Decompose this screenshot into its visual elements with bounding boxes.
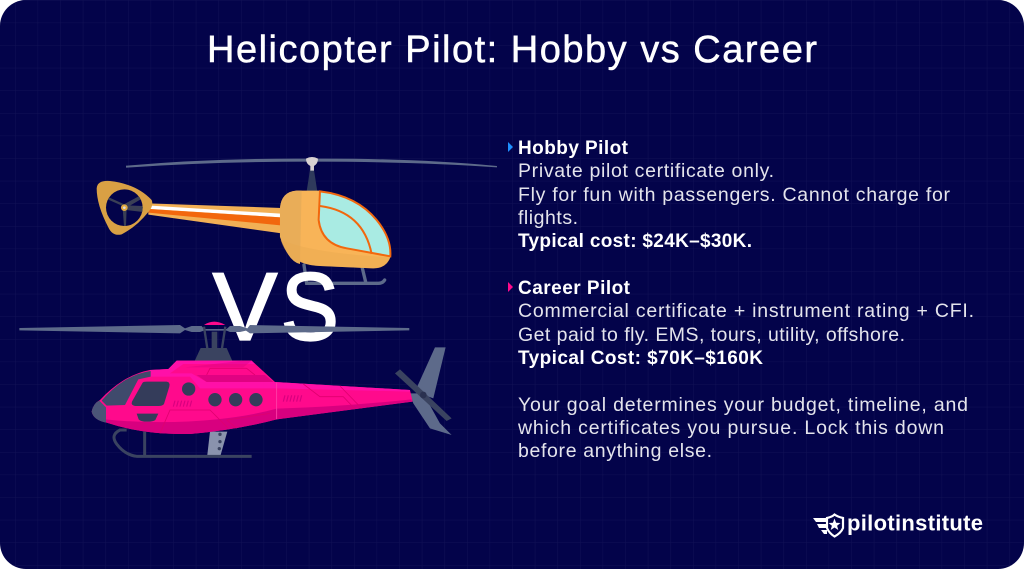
rotor head — [194, 322, 233, 362]
tail boom — [148, 203, 282, 233]
body line: Private pilot certificate only. — [518, 160, 774, 182]
illustration: orange hobby helicopter — [97, 157, 497, 283]
typical cost: Typical cost: $24K–$30K. — [518, 231, 752, 252]
logo wordmark: pilotinstitute — [847, 510, 983, 536]
landing skid — [304, 265, 385, 283]
body line: Commercial certificate + instrument rating + CFI. — [518, 300, 974, 322]
tail fin and rotor — [395, 347, 452, 435]
VS label: S — [281, 253, 339, 361]
text panel — [508, 138, 974, 462]
VS label — [213, 253, 339, 361]
cockpit window — [319, 191, 390, 256]
bullet marker: pink — [508, 282, 513, 292]
main rotor — [126, 159, 497, 168]
heading: hobby pilot: Hobby Pilot — [518, 138, 629, 159]
tail rotor housing — [97, 181, 152, 235]
panel lines — [160, 368, 362, 433]
typical cost: Typical Cost: $70K–$160K — [518, 348, 763, 369]
mast — [307, 170, 317, 191]
cabin — [280, 191, 391, 268]
cockpit window — [132, 382, 170, 406]
body line: flights. — [518, 207, 578, 229]
section: career pilot — [508, 278, 974, 369]
closing note: before anything else. — [518, 440, 712, 462]
VS label: V — [213, 254, 277, 360]
icon: winged shield — [813, 514, 843, 536]
fuselage — [92, 361, 413, 434]
closing note — [517, 394, 968, 462]
bullet marker: blue — [508, 142, 513, 152]
closing note: Your goal determines your budget, timeline, and — [518, 394, 968, 416]
title: Helicopter Pilot: Hobby vs Career — [207, 29, 817, 71]
heading: career pilot: Career Pilot — [518, 278, 631, 299]
fuselage highlight — [150, 361, 410, 392]
logo: pilot institute — [813, 510, 983, 536]
windshield — [102, 371, 151, 406]
body line: Get paid to fly. EMS, tours, utility, offshore. — [518, 324, 905, 346]
vents — [173, 395, 302, 407]
fuselage shading — [105, 361, 412, 434]
landing gear — [114, 430, 252, 456]
rotor hub — [306, 157, 318, 171]
nose — [92, 401, 106, 423]
section: hobby pilot — [508, 138, 950, 252]
portholes — [182, 382, 263, 406]
main rotor — [19, 325, 409, 333]
body line: Fly for fun with passengers. Cannot charge for — [518, 184, 950, 206]
illustration: pink career helicopter — [19, 322, 452, 456]
closing note: which certificates you pursue. Lock this down — [517, 417, 944, 439]
door window — [137, 414, 158, 422]
